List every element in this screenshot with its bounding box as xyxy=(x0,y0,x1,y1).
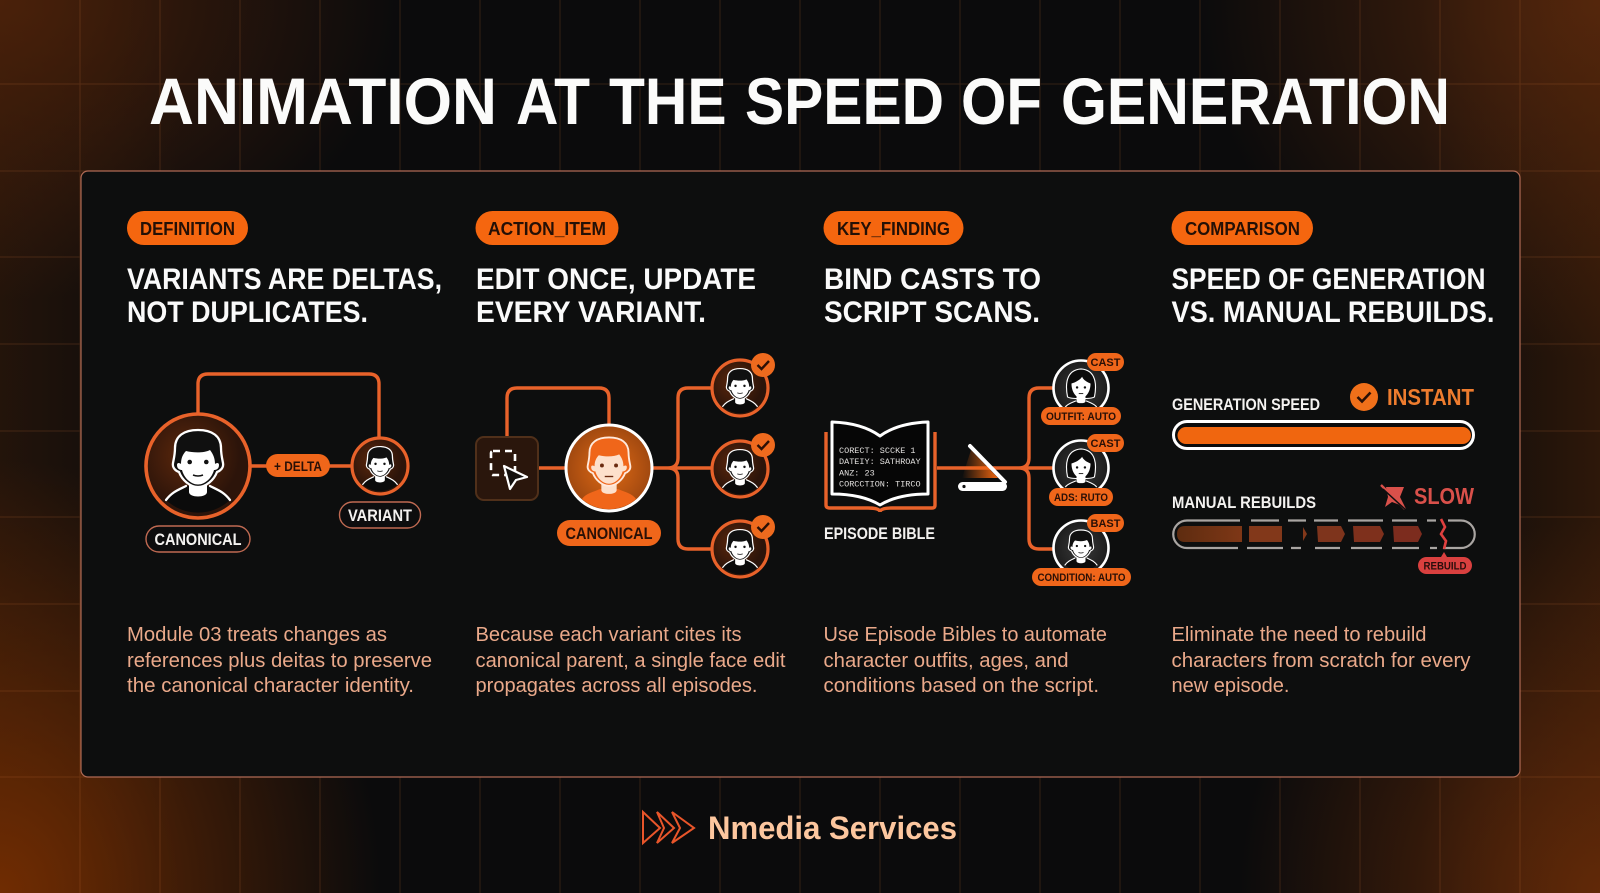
heading: bind casts: BIND CASTS TO xyxy=(824,263,1041,296)
heading: bind casts: SCRIPT SCANS. xyxy=(824,296,1040,329)
variant label: VARIANT xyxy=(348,507,412,525)
title: OF xyxy=(961,64,1042,138)
tag: key finding: KEY_FINDING xyxy=(837,218,950,239)
body text: characters from scratch for every xyxy=(1172,649,1471,672)
title: THE xyxy=(609,64,726,138)
body text: Eliminate the need to rebuild xyxy=(1172,623,1426,646)
heading: edit once: EDIT ONCE, UPDATE xyxy=(476,263,756,296)
icon: slow muted xyxy=(1381,485,1407,511)
canonical pill: CANONICAL xyxy=(566,525,652,543)
icon: canonical character xyxy=(146,414,250,518)
icon: cast 2: CAST xyxy=(1091,438,1121,450)
icon: cast 1 xyxy=(1041,353,1124,425)
icon: canonical character edited xyxy=(566,425,652,511)
rebuild pill xyxy=(1418,552,1472,574)
body text: Because each variant cites its xyxy=(476,623,742,646)
chart: manual rebuilds bar xyxy=(1172,483,1475,574)
tag: definition: DEFINITION xyxy=(140,218,235,239)
heading: variants are deltas xyxy=(127,263,442,329)
body text xyxy=(824,623,1107,697)
chart: manual rebuilds bar: MANUAL REBUILDS xyxy=(1172,494,1316,512)
icon: scanner xyxy=(958,446,1007,491)
title: SPEED xyxy=(745,64,944,138)
body text: Use Episode Bibles to automate xyxy=(824,623,1107,646)
canonical label xyxy=(146,526,250,552)
icon: open book xyxy=(826,422,935,512)
heading: variants are deltas: NOT DUPLICATES. xyxy=(127,296,368,329)
icon: select cursor xyxy=(476,437,538,500)
heading: speed of generation: VS. MANUAL REBUILDS. xyxy=(1172,296,1494,329)
icon: instant check xyxy=(1350,383,1378,411)
body text: character outfits, ages, and xyxy=(824,649,1068,672)
body text: conditions based on the script. xyxy=(824,674,1099,697)
tag: definition xyxy=(127,211,248,245)
body text: Module 03 treats changes as xyxy=(127,623,387,646)
panel: definition xyxy=(127,211,442,697)
body text: references plus deitas to preserve xyxy=(127,649,432,672)
title: AT xyxy=(516,64,590,138)
heading: bind casts xyxy=(824,263,1041,329)
chart: generation speed bar xyxy=(1172,383,1474,448)
icon: cast 3: BAST xyxy=(1091,518,1121,530)
heading: edit once xyxy=(476,263,756,329)
icon: open book: DATEIY: SATHROAY xyxy=(839,457,921,467)
rebuild pill: REBUILD xyxy=(1424,560,1467,572)
chart: manual rebuilds bar: SLOW xyxy=(1414,483,1474,509)
main panel xyxy=(81,171,1520,777)
panel: key finding xyxy=(824,211,1131,697)
canonical label: CANONICAL xyxy=(154,531,242,549)
icon: cast 3 xyxy=(1032,514,1131,586)
body text: canonical parent, a single face edit xyxy=(476,649,786,672)
body text: new episode. xyxy=(1172,674,1290,697)
diagram: edit propagation xyxy=(476,353,775,577)
tag: comparison: COMPARISON xyxy=(1185,218,1300,239)
tag: key finding xyxy=(824,211,964,245)
body text xyxy=(1172,623,1471,697)
delta pill: + DELTA xyxy=(274,459,322,474)
body text xyxy=(127,623,432,697)
body text: propagates across all episodes. xyxy=(476,674,758,697)
title: ANIMATION xyxy=(149,64,497,138)
chart: generation speed bar: INSTANT xyxy=(1387,384,1474,410)
chart: generation speed bar: GENERATION SPEED xyxy=(1172,396,1320,414)
tag: comparison xyxy=(1172,211,1313,245)
icon: triple chevrons xyxy=(643,812,694,843)
body text: the canonical character identity. xyxy=(127,674,414,697)
icon: variant 3 xyxy=(712,515,775,577)
icon: variant 1 xyxy=(712,353,775,416)
diagram: episode bible scan xyxy=(824,353,1131,586)
panel: comparison xyxy=(1172,211,1494,697)
book label: EPISODE BIBLE xyxy=(824,525,935,543)
heading: speed of generation xyxy=(1172,263,1494,329)
panel: action item xyxy=(476,211,786,697)
icon: cast 2: ADS: RUTO xyxy=(1054,492,1108,504)
footer logo xyxy=(643,810,957,846)
heading: edit once: EVERY VARIANT. xyxy=(476,296,706,329)
tag: action item: ACTION_ITEM xyxy=(488,218,606,239)
body text xyxy=(476,623,786,697)
variant label xyxy=(340,502,420,528)
icon: variant character xyxy=(352,438,408,494)
heading: speed of generation: SPEED OF GENERATION xyxy=(1172,263,1486,296)
icon: cast 1: CAST xyxy=(1091,357,1121,369)
title xyxy=(149,64,1450,138)
icon: cast 3: CONDITION: AUTO xyxy=(1038,572,1126,584)
delta pill xyxy=(266,454,330,477)
title: GENERATION xyxy=(1061,64,1450,138)
tag: action item xyxy=(476,211,618,245)
icon: variant 2 xyxy=(712,433,775,497)
icon: open book: CORECT: SCCKE 1 xyxy=(839,446,916,456)
diagram: canonical plus delta variant xyxy=(146,374,420,552)
canonical pill xyxy=(557,520,661,546)
icon: open book: CORCCTION: TIRCO xyxy=(839,480,921,490)
brand name: Nmedia Services xyxy=(708,810,957,846)
heading: variants are deltas: VARIANTS ARE DELTAS, xyxy=(127,263,442,296)
icon: cast 1: OUTFIT: AUTO xyxy=(1046,411,1116,423)
icon: open book: ANZ: 23 xyxy=(839,468,875,478)
icon: cast 2 xyxy=(1049,434,1124,506)
